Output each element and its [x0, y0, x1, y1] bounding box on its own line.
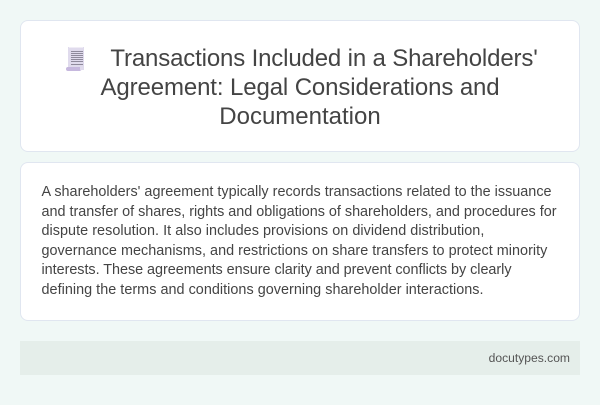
icon: document scroll — [66, 47, 84, 71]
heading: title: Transactions Included in a Shareholders' — [110, 45, 538, 72]
text block: description: dispute resolution. It also includes provisions on dividend distribution, — [42, 223, 484, 239]
text block: description: and transfer of shares, rights and obligations of shareholders, and procedures for — [42, 204, 556, 220]
panel: description card — [20, 162, 580, 321]
text block: description — [42, 184, 556, 298]
text block: description: defining the terms and conditions governing shareholder interactions. — [42, 282, 484, 298]
footer bar — [20, 341, 580, 375]
text block: description: governance mechanisms, and restrictions on share transfers to protect minority — [42, 243, 547, 259]
text block: description: A shareholders' agreement typically records transactions related to the issuance — [42, 184, 552, 200]
panel: title card — [20, 20, 580, 152]
text block: description: interests. These agreements ensure clarity and prevent conflicts by clearly — [42, 262, 511, 278]
footer text: source: docutypes.com — [489, 351, 570, 365]
heading: title — [100, 45, 538, 130]
heading: title: Agreement: Legal Considerations and — [100, 74, 500, 101]
heading: title: Documentation — [219, 103, 381, 130]
